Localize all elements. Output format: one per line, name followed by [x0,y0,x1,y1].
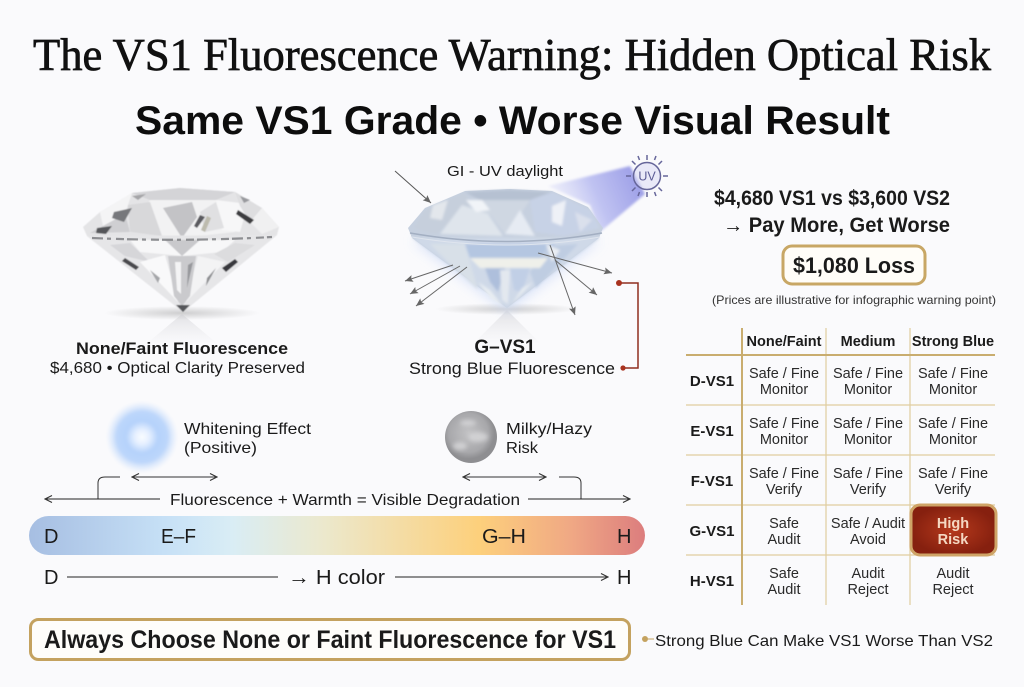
callout: loss: $1,080 Loss [793,253,915,278]
table: fluorescence matrix: D-VS1 [690,373,734,390]
table: fluorescence matrix: Verify [935,482,972,498]
text: G-VS1 label: G–VS1 [474,337,536,358]
table: fluorescence matrix: Monitor [844,382,892,398]
table: fluorescence matrix: Safe / Fine [833,366,903,382]
table: fluorescence matrix: F-VS1 [691,473,733,490]
arrow: D to H color: H [617,567,631,589]
text: none/faint label: $4,680 • Optical Clarity Preserved [50,360,305,377]
color gradient bar [29,516,645,555]
label: whitening effect [184,421,312,457]
table: fluorescence matrix: Verify [850,482,887,498]
label: whitening effect: (Positive) [184,440,257,457]
table: fluorescence matrix: Monitor [844,432,892,448]
price comparison: → Pay More, Get Worse [723,214,950,237]
color gradient bar: D [44,526,58,548]
icon: UV sun: UV [638,170,656,184]
side note: Strong Blue Can Make VS1 Worse Than VS2 [655,633,993,650]
text: G-VS1 label [409,337,615,378]
table: fluorescence matrix: Safe / Fine [918,466,988,482]
high risk cell [911,505,996,555]
crown [132,188,235,200]
table: fluorescence matrix: Audit [851,566,885,582]
table: fluorescence matrix: Safe / Fine [833,416,903,432]
arrows: scattered light [405,245,612,315]
icon: UV beam [548,166,645,232]
table: fluorescence matrix: Safe / Fine [749,466,819,482]
title: The VS1 Fluorescence Warning: Hidden Optical Risk [33,29,991,80]
table: fluorescence matrix: Medium [841,334,895,350]
icon: hazy diamond [408,189,603,345]
table: fluorescence matrix: Monitor [760,382,808,398]
price comparison [714,187,950,237]
table: fluorescence matrix: Safe / Audit [831,516,905,532]
label: milky hazy risk [506,421,592,457]
table: fluorescence matrix: Monitor [760,432,808,448]
label: whitening effect: Whitening Effect [184,421,312,438]
table: fluorescence matrix: Audit [767,532,801,548]
callout: loss [783,246,925,284]
text: G-VS1 label: Strong Blue Fluorescence [409,360,615,378]
table: fluorescence matrix: H-VS1 [690,573,734,590]
table: fluorescence matrix: Safe / Fine [833,466,903,482]
callout: always choose [30,620,630,660]
text: none/faint label [50,339,305,377]
color gradient bar: G–H [482,526,526,548]
table: fluorescence matrix: Monitor [929,382,977,398]
table: fluorescence matrix [686,328,996,605]
table: fluorescence matrix: Avoid [850,532,886,548]
table: fluorescence matrix: Reject [932,582,974,598]
table: fluorescence matrix: Reject [847,582,889,598]
connector: red bracket [616,280,638,371]
arrow: degradation axis: Fluorescence + Warmth = Visible Degradation [170,492,520,509]
note: (Prices are illustrative for infographic warning point) [712,293,996,307]
icon: milky sphere [445,411,497,463]
text: none/faint label: None/Faint Fluorescence [76,339,288,358]
label: milky hazy risk: Risk [506,440,539,457]
table: fluorescence matrix: Safe / Fine [749,366,819,382]
arrow: incoming light [395,171,431,203]
high risk cell: Risk [938,532,969,548]
subtitle: Same VS1 Grade • Worse Visual Result [135,99,890,143]
price comparison: $4,680 VS1 vs $3,600 VS2 [714,187,950,210]
arrows: range indicators [98,477,581,499]
pavilion [412,238,600,308]
icon: clear diamond [83,188,279,345]
dark crown accents [194,215,205,228]
table: fluorescence matrix: G-VS1 [689,523,735,540]
color gradient bar: H [617,526,631,548]
arrow: D to H color [44,567,631,589]
table: fluorescence matrix: Verify [766,482,803,498]
color gradient bar: E–F [161,526,196,548]
table: fluorescence matrix: Safe / Fine [918,416,988,432]
callout: always choose: Always Choose None or Faint Fluorescence for VS1 [44,626,616,654]
icon: whitening glow [106,401,178,473]
table: fluorescence matrix: Safe / Fine [749,416,819,432]
pavilion [87,235,277,312]
table: fluorescence matrix: Monitor [929,432,977,448]
table: fluorescence matrix: Strong Blue [912,334,994,350]
table: fluorescence matrix: E-VS1 [690,423,734,440]
table: fluorescence matrix: Safe [769,566,799,582]
arrow: D to H color: → H color [288,567,385,589]
high risk cell: High [937,516,969,532]
table: fluorescence matrix: None/Faint [747,334,822,350]
table: fluorescence matrix: Audit [767,582,801,598]
icon: UV sun [626,155,668,197]
table: fluorescence matrix: Audit [936,566,970,582]
label: GI UV daylight: GI - UV daylight [447,163,564,180]
table: fluorescence matrix: Safe / Fine [918,366,988,382]
arrow: D to H color: D [44,567,58,589]
table: fluorescence matrix: Safe [769,516,799,532]
label: milky hazy risk: Milky/Hazy [506,421,592,438]
